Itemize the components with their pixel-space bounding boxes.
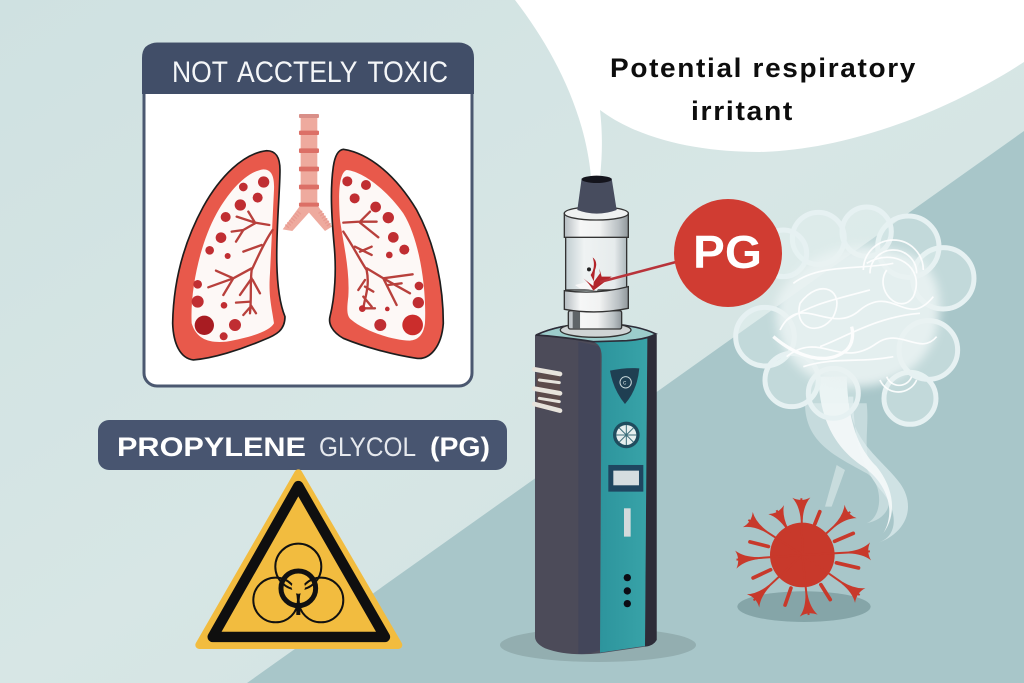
glass tank xyxy=(566,235,627,291)
smoke xyxy=(735,207,974,622)
fan icon xyxy=(613,422,640,448)
background: dark teal diagonal xyxy=(247,131,1024,683)
tank top ring xyxy=(564,207,628,237)
panel frame xyxy=(144,44,472,386)
panel heading: NOT ACCTELY TOXIC xyxy=(172,56,448,89)
speech bubble text: irritant xyxy=(691,96,794,126)
cloud core xyxy=(773,240,940,392)
slider xyxy=(624,508,631,537)
speech bubble text: Potential respiratory xyxy=(610,53,917,83)
shield icon: c xyxy=(623,380,627,387)
coils xyxy=(534,369,560,411)
label word: propylene: PROPYLENE xyxy=(117,432,306,462)
dots xyxy=(624,574,631,607)
panel: not acutely toxic xyxy=(142,43,474,386)
tank lower ring xyxy=(564,287,628,312)
screen xyxy=(608,465,643,492)
callout circle xyxy=(674,199,782,307)
left lung xyxy=(173,151,285,360)
virus shadow xyxy=(737,591,871,622)
connector base xyxy=(560,311,631,337)
PG callout xyxy=(600,199,782,307)
trachea xyxy=(283,114,332,231)
device shadow xyxy=(500,628,696,662)
icon: biohazard warning triangle xyxy=(199,473,398,645)
shield icon xyxy=(610,368,639,404)
vapor cloud xyxy=(736,207,974,424)
panel header bar xyxy=(142,43,474,94)
callout leader line xyxy=(600,262,676,282)
label word: glycol: GLYCOL xyxy=(319,432,416,462)
lungs illustration xyxy=(173,114,443,360)
speech bubble text xyxy=(610,53,917,126)
label word: pg: (PG) xyxy=(430,432,490,462)
virus icon xyxy=(735,497,871,617)
device body xyxy=(535,323,657,654)
right lung xyxy=(330,149,443,358)
smoke plume xyxy=(805,377,908,543)
callout text: PG xyxy=(693,226,762,278)
flame xyxy=(583,257,612,291)
speech bubble xyxy=(515,0,1024,177)
drip tip xyxy=(577,176,617,214)
vape device xyxy=(534,176,657,654)
label bar: propylene glycol xyxy=(98,420,507,470)
